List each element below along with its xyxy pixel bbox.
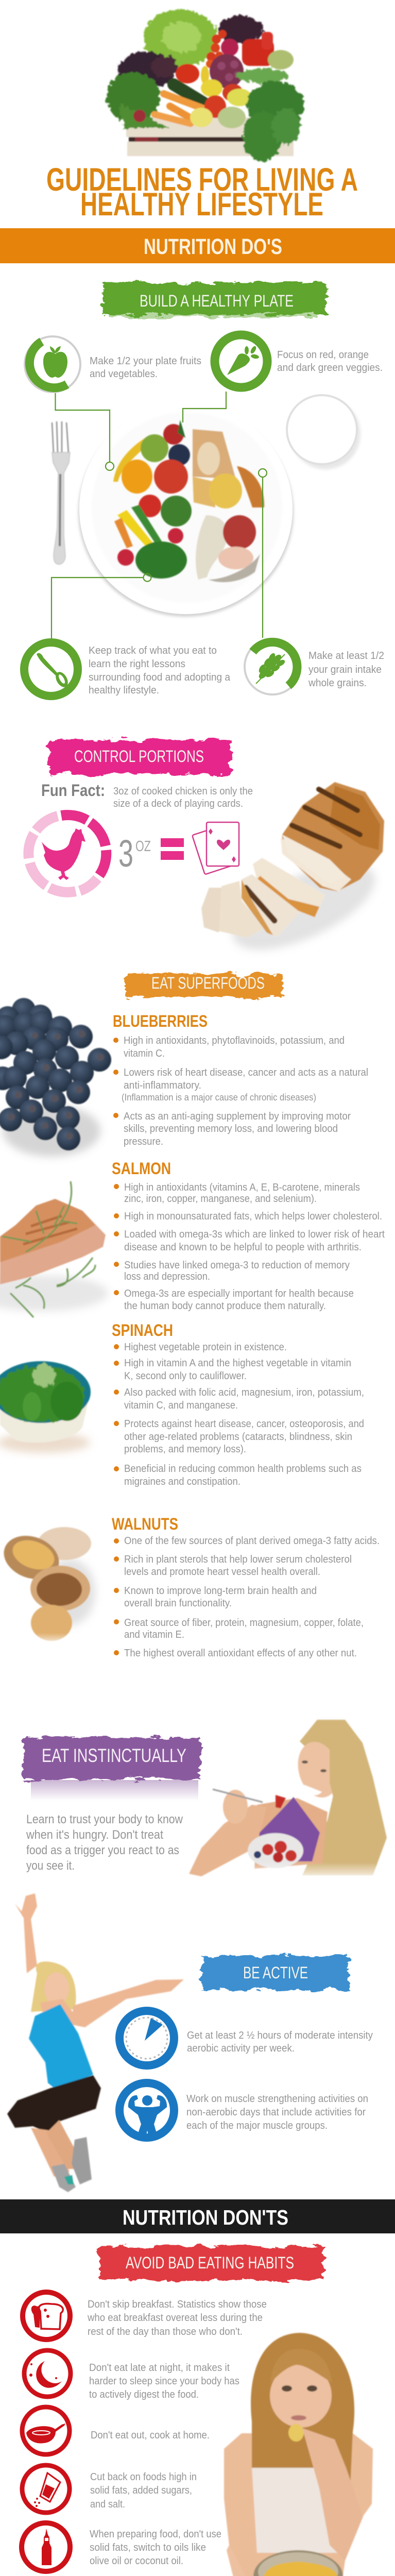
superfood: spinach: problems, and memory loss). <box>124 1444 246 1455</box>
heading: build a healthy plate: BUILD A HEALTHY PLATE <box>140 292 294 310</box>
superfood: blueberries: BLUEBERRIES <box>113 1012 208 1030</box>
text: muscle strengthening: non-aerobic days that include activities for <box>186 2107 366 2118</box>
equation: 3oz equals two playing cards <box>118 822 239 875</box>
superfood: blueberries: vitamin C. <box>124 1048 165 1059</box>
superfood: walnuts: and vitamin E. <box>124 1629 184 1640</box>
text: muscle strengthening: each of the major muscle groups. <box>186 2120 328 2131</box>
heading: control portions: CONTROL PORTIONS <box>74 747 204 766</box>
superfood: blueberries: Acts as an anti-aging supplement by improving motor <box>124 1111 351 1122</box>
callout: keep track: Keep track of what you eat to <box>89 645 217 656</box>
photo: grilled salmon with rosemary <box>0 1181 108 1317</box>
superfood: salmon: Studies have linked omega-3 to reduction of memory <box>124 1260 350 1271</box>
superfood: spinach: Protects against heart disease, cancer, osteoporosis, and <box>124 1418 364 1430</box>
fun fact text <box>41 781 253 809</box>
superfood: salmon: Omega-3s are especially important for health because <box>124 1288 354 1299</box>
heading: control portions <box>49 740 231 774</box>
superfood: walnuts: levels and promote heart vessel health overall. <box>124 1566 320 1578</box>
section banner: nutrition do's <box>0 228 395 263</box>
text: eat instinctually: you see it. <box>26 1859 75 1873</box>
callout: keep track: healthy lifestyle. <box>89 685 159 696</box>
icon: chicken <box>42 828 85 880</box>
superfood: walnuts: The highest overall antioxidant effects of any other nut. <box>124 1648 357 1659</box>
photo: woman jumping <box>7 1893 184 2192</box>
habit: cook at home: Don't eat out, cook at home. <box>91 2430 210 2441</box>
superfood: blueberries: pressure. <box>124 1136 163 1147</box>
superfood: salmon: the human body cannot produce them naturally. <box>124 1300 326 1312</box>
superfood: spinach: Highest vegetable protein in existence. <box>124 1342 287 1353</box>
superfood: blueberries: anti-inflammatory. <box>124 1080 201 1091</box>
icon: apple <box>43 346 67 378</box>
superfood: blueberries <box>113 1012 368 1147</box>
section banner: nutrition don'ts: NUTRITION DON'TS <box>123 2206 288 2229</box>
habit: fats, sugars, salt: solid fats, added sugars, <box>90 2485 192 2496</box>
superfood: blueberries: Lowers risk of heart disease, cancer and acts as a natural <box>124 1067 368 1078</box>
superfood: spinach: Also packed with folic acid, magnesium, iron, potassium, <box>124 1387 364 1398</box>
icon: toast <box>23 2292 70 2340</box>
callout: fruits and vegetables <box>25 336 201 392</box>
superfood: walnuts: Rich in plant sterols that help lower serum cholesterol <box>124 1554 352 1565</box>
fun fact text: Fun Fact: <box>41 781 105 800</box>
icon: oil bottle <box>22 2523 70 2571</box>
fun fact text: size of a deck of playing cards. <box>113 798 243 809</box>
superfood: salmon: loss and depression. <box>124 1271 210 1282</box>
habit: skip breakfast <box>23 2292 267 2340</box>
heading: be active: BE ACTIVE <box>243 1963 308 1982</box>
icon: frying pan <box>22 2407 70 2454</box>
photo: woman eating berries <box>189 1720 387 1881</box>
superfood: walnuts: overall brain functionality. <box>124 1598 232 1609</box>
photo: glass of milk <box>287 395 360 469</box>
photo: walnuts <box>0 1527 95 1646</box>
superfood: spinach: migraines and constipation. <box>124 1476 241 1487</box>
habit: solid fats: solid fats, switch to oils like <box>90 2542 206 2553</box>
superfood: spinach: High in vitamin A and the highest vegetable in vitamin <box>124 1358 351 1369</box>
superfood: salmon <box>112 1159 385 1312</box>
icon: moon <box>24 2350 71 2397</box>
superfood: salmon: High in monounsaturated fats, which helps lower cholesterol. <box>124 1211 382 1222</box>
habit: solid fats <box>22 2523 221 2571</box>
icon: wheat <box>256 652 286 684</box>
superfood: spinach: vitamin C, and manganese. <box>124 1400 238 1411</box>
superfood: spinach <box>112 1321 364 1487</box>
superfood: salmon: High in antioxidants (vitamins A, E, B-carotene, minerals <box>124 1182 360 1193</box>
text: eat instinctually: when it's hungry. Don't treat <box>26 1828 163 1842</box>
callout: veggies: Focus on red, orange <box>277 349 369 361</box>
superfood: spinach: other age-related problems (cataracts, blindness, skin <box>124 1431 352 1443</box>
habit: late at night: harder to sleep since your body has <box>89 2376 239 2387</box>
superfood: salmon: zinc, iron, copper, manganese, and selenium). <box>124 1193 317 1205</box>
photo: blueberries <box>0 998 111 1157</box>
heading: be active <box>202 1956 349 1990</box>
heading: eat superfoods <box>126 974 283 997</box>
photo: sliced grilled chicken <box>201 782 387 968</box>
text: eat instinctually: food as a trigger you react to as <box>26 1843 179 1857</box>
callout: whole grains: your grain intake <box>308 664 382 675</box>
photo: woman eating chips <box>224 2333 373 2576</box>
section banner: nutrition do's: NUTRITION DO'S <box>144 234 282 259</box>
superfood: salmon: disease and known to be helpful to people with arthritis. <box>124 1242 362 1253</box>
heading: eat superfoods: EAT SUPERFOODS <box>151 974 265 992</box>
heading: eat instinctually: EAT INSTINCTUALLY <box>42 1745 186 1766</box>
text: muscle strengthening: Work on muscle strengthening activities on <box>186 2093 368 2105</box>
chart: portion ring, 3 of 8 segments <box>28 815 106 892</box>
superfood: spinach: SPINACH <box>112 1321 173 1340</box>
superfood: salmon: Loaded with omega-3s which are linked to lower risk of heart <box>124 1229 385 1240</box>
superfood: blueberries: (Inflammation is a major cause of chronic diseases) <box>122 1092 316 1103</box>
photo: crate of vegetables <box>107 9 304 161</box>
text: eat instinctually: Learn to trust your body to know <box>26 1812 183 1826</box>
habit: solid fats: When preparing food, don't use <box>90 2529 221 2540</box>
superfood: walnuts <box>112 1515 380 1659</box>
heading: avoid bad eating habits <box>99 2246 323 2280</box>
heading: build a healthy plate <box>103 283 325 317</box>
habit: cook at home <box>22 2407 210 2454</box>
text: aerobic activity <box>187 2030 373 2054</box>
title <box>46 162 358 223</box>
icon: playing cards <box>192 822 239 874</box>
icon: salt shaker <box>22 2465 70 2513</box>
superfood: spinach: Beneficial in reducing common health problems such as <box>124 1463 362 1475</box>
photo: bowl of spinach <box>0 1361 91 1453</box>
habit: fats, sugars, salt: Cut back on foods high in <box>90 2471 197 2483</box>
habit: skip breakfast: Don't skip breakfast. Statistics show those <box>88 2299 267 2310</box>
superfood: salmon: SALMON <box>112 1159 171 1178</box>
superfood: walnuts: Great source of fiber, protein, magnesium, copper, folate, <box>124 1617 364 1629</box>
superfood: walnuts: Known to improve long-term brain health and <box>124 1585 317 1597</box>
habit: late at night: to actively digest the food. <box>89 2389 199 2400</box>
callout: whole grains: whole grains. <box>308 677 367 689</box>
equation: 3oz equals two playing cards: OZ <box>135 838 151 855</box>
fun fact text: 3oz of cooked chicken is only the <box>113 786 253 797</box>
connector lines <box>51 392 267 639</box>
callout: fruits and vegetables: and vegetables. <box>90 368 158 380</box>
text: muscle strengthening <box>186 2093 368 2131</box>
callout: whole grains: Make at least 1/2 <box>308 650 384 662</box>
callout: keep track: surrounding food and adopting a <box>89 672 231 683</box>
icon: carrot <box>227 345 260 375</box>
heading: eat instinctually <box>23 1737 201 1801</box>
habit: fats, sugars, salt <box>22 2465 197 2513</box>
superfood: walnuts: WALNUTS <box>112 1515 178 1533</box>
habit: skip breakfast: who eat breakfast overeat less during the <box>87 2312 263 2324</box>
text: aerobic activity: aerobic activity per week. <box>187 2043 295 2054</box>
callout: veggies: and dark green veggies. <box>277 362 383 374</box>
callout: veggies <box>215 335 383 387</box>
superfood: spinach: K, second only to cauliflower. <box>124 1370 247 1382</box>
icon: spoon <box>37 653 71 689</box>
habit: fats, sugars, salt: and salt. <box>90 2499 125 2510</box>
photo: fork <box>52 421 70 564</box>
callout: keep track: learn the right lessons <box>89 658 185 670</box>
photo: plate of food <box>78 404 294 617</box>
superfood: blueberries: skills, preventing memory loss, and lowering blood <box>124 1123 338 1134</box>
callout: whole grains <box>245 639 384 694</box>
habit: solid fats: olive oil or coconut oil. <box>90 2555 183 2567</box>
superfood: walnuts: One of the few sources of plant derived omega-3 fatty acids. <box>124 1535 380 1547</box>
superfood: blueberries: High in antioxidants, phytoflavinoids, potassium, and <box>124 1035 345 1046</box>
icon: muscle man <box>119 2083 174 2140</box>
callout: fruits and vegetables: Make 1/2 your plate fruits <box>90 355 201 367</box>
callout: keep track <box>24 642 231 696</box>
habit: late at night: Don't eat late at night, it makes it <box>89 2362 230 2374</box>
section banner: nutrition don'ts <box>0 2199 395 2233</box>
habit: late at night <box>24 2350 239 2400</box>
heading: avoid bad eating habits: AVOID BAD EATING HABITS <box>126 2253 294 2272</box>
text: eat instinctually <box>26 1812 183 1873</box>
text: aerobic activity: Get at least 2 ½ hours of moderate intensity <box>187 2030 373 2041</box>
habit: skip breakfast: rest of the day than those who don't. <box>88 2326 243 2337</box>
icon: clock <box>119 2011 174 2065</box>
equation: 3oz equals two playing cards: 3 <box>118 832 133 875</box>
